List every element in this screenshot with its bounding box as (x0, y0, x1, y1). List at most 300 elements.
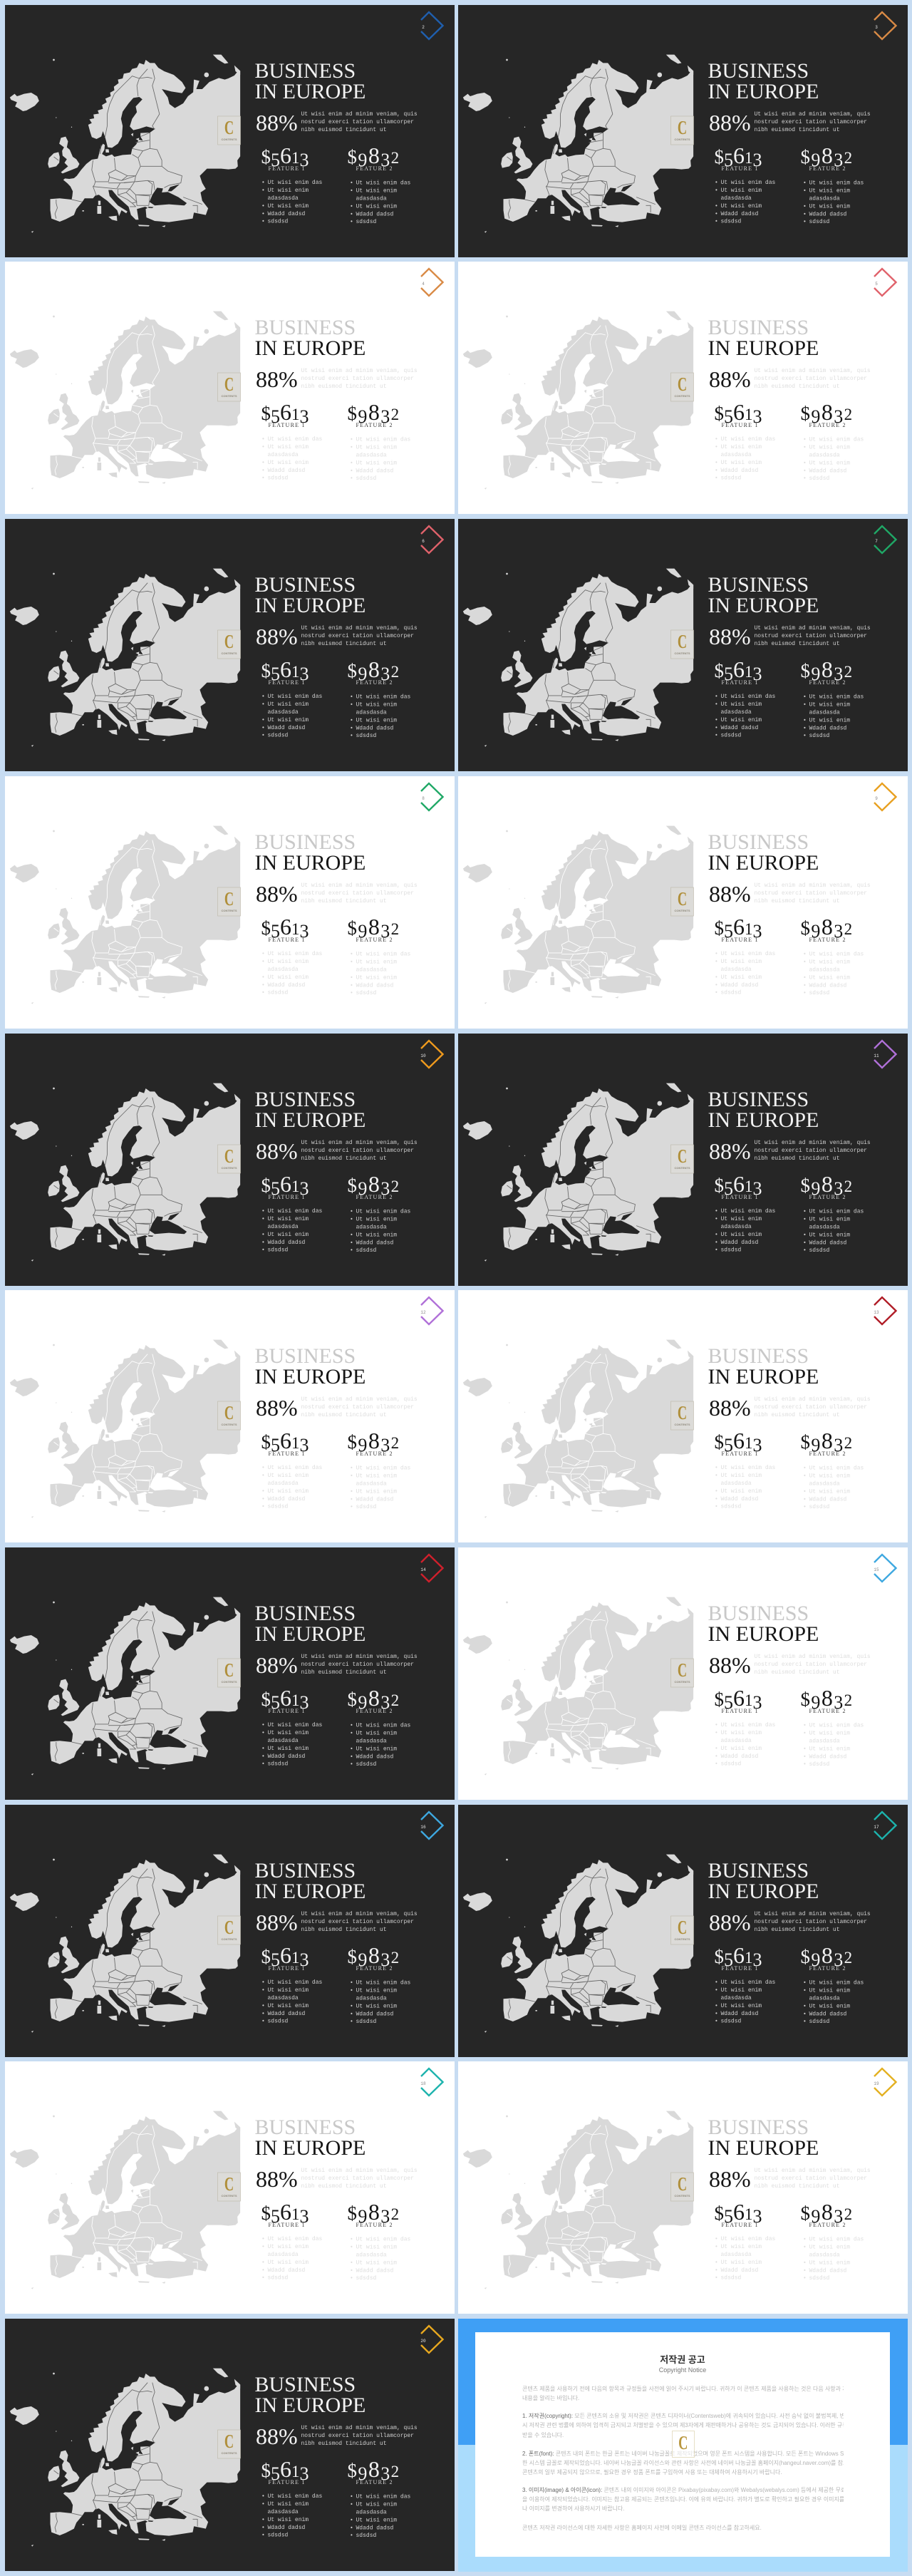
list: feature 2: Ut wisi enim (809, 204, 850, 210)
text block: section 3 (522, 2486, 844, 2512)
list: feature 1 (715, 951, 776, 996)
label: feature 2: FEATURE 2 (809, 1965, 845, 1972)
list: feature 2: • (350, 1232, 353, 1239)
stat: 88%: 88% (709, 366, 751, 392)
figure: $9832: 8 (368, 656, 380, 682)
list: feature 1: • (715, 187, 718, 194)
figure: $9832: $ (348, 1689, 358, 1710)
title (255, 2116, 366, 2160)
list: feature 2: Wdadd dadsd (356, 2011, 394, 2017)
list: feature 2: Ut wisi enim (356, 2502, 397, 2508)
logo watermark: CONTENTS (674, 1423, 690, 1426)
figure: $9832: 9 (358, 1178, 368, 1199)
title (708, 2116, 819, 2160)
title: IN EUROPE (255, 1880, 366, 1903)
list: feature 1: • (715, 2260, 718, 2266)
figure: $5613: 1 (745, 1691, 752, 1709)
list: feature 2: Wdadd dadsd (809, 2268, 847, 2274)
logo watermark: C (224, 373, 234, 395)
figure: $5613: $ (714, 403, 724, 424)
figure: $5613: 1 (291, 2463, 299, 2480)
title: BUSINESS (708, 830, 809, 854)
list: feature 1: • (261, 2260, 265, 2266)
list: feature 1: • (715, 2244, 718, 2250)
figure: $5613: $ (261, 2460, 271, 2481)
text block: Ut wisi enim ad minim veniam, quis (301, 1911, 418, 1917)
figure: $5613: 6 (733, 143, 745, 168)
figure: $5613: 6 (733, 1171, 745, 1197)
list: feature 2: Ut wisi enim (356, 445, 397, 450)
figure: $9832: 9 (811, 1692, 822, 1713)
list: feature 2 (350, 1980, 411, 2025)
list: feature 2: • (350, 468, 353, 475)
list: feature 2: • (350, 1761, 353, 1768)
panel: slide 2 dark (5, 5, 455, 257)
figure: $9832: 8 (368, 2456, 380, 2482)
title (708, 573, 819, 617)
list: feature 2 (803, 1209, 864, 1254)
figure: $5613: 5 (271, 2463, 280, 2484)
list: feature 2: Ut wisi enim (809, 188, 850, 194)
list: feature 1: adasdasda (268, 195, 299, 202)
list: feature 2: • (350, 2533, 353, 2539)
figure: $9832: $ (801, 1689, 811, 1710)
figure: $9832: 9 (811, 2206, 822, 2227)
list: feature 1: Ut wisi enim (721, 1987, 762, 1994)
figure: $9832: 3 (834, 406, 844, 427)
stat: 88%: 88% (709, 1395, 751, 1421)
list: feature 2: Wdadd dadsd (356, 1240, 394, 1246)
figure: $9832: $ (348, 1175, 358, 1196)
icon: page badge 17 (874, 1812, 896, 1839)
text block: Ut wisi enim ad minim veniam, quis (301, 2425, 418, 2431)
figure: $9832: $ (801, 1946, 811, 1967)
list: feature 1: • (261, 444, 265, 450)
icon: page badge 12 (420, 1297, 443, 1324)
list: feature 1: sdsdsd (268, 218, 289, 225)
list: feature 1: Ut wisi enim (721, 2244, 762, 2250)
label: feature 2: FEATURE 2 (356, 1451, 392, 1457)
list: feature 1: Wdadd dadsd (268, 982, 306, 989)
list: feature 2: sdsdsd (356, 1761, 377, 1768)
figure: $5613: 6 (733, 1685, 745, 1711)
figure: $9832: 8 (822, 1685, 834, 1711)
list: feature 2: • (803, 1761, 807, 1768)
logo watermark: CONTENTS (674, 2194, 690, 2198)
icon: page badge 9: 9 (875, 796, 878, 801)
icon: page badge 3 (874, 12, 896, 39)
list: feature 1: • (715, 2267, 718, 2274)
list: feature 1: • (261, 2003, 265, 2009)
title (708, 1602, 819, 1646)
list: feature 2: • (350, 2003, 353, 2010)
list: feature 1: Wdadd dadsd (268, 211, 306, 217)
list: feature 1: • (261, 725, 265, 731)
list: feature 1: sdsdsd (268, 1504, 289, 1510)
text block: nostrud exerci tation ullamcorper (754, 1919, 867, 1925)
figure: $9832: $ (801, 1175, 811, 1196)
figure: $9832: 8 (368, 143, 380, 168)
text block: section 1: 받을 수 있습니다. (522, 2432, 564, 2438)
list: feature 2: Wdadd dadsd (809, 1497, 847, 1503)
title: IN EUROPE (255, 2394, 366, 2417)
list: feature 1: adasdasda (268, 1224, 299, 1230)
list: feature 1: • (261, 1753, 265, 1760)
list: feature 1: • (261, 211, 265, 217)
list: feature 1: • (261, 1247, 265, 1253)
list: feature 1: • (261, 701, 265, 708)
list: feature 2: • (350, 1980, 353, 1986)
stat: 88%: 88% (709, 881, 751, 907)
logo watermark: CONTENTS (221, 1423, 237, 1426)
list: feature 1: • (261, 2275, 265, 2281)
list: feature 2: Wdadd dadsd (356, 1497, 394, 1503)
list: feature 2: sdsdsd (356, 990, 377, 996)
list: feature 1: Ut wisi enim (721, 444, 762, 450)
icon: page badge 2: 2 (422, 25, 425, 30)
list: feature 2: • (350, 1488, 353, 1495)
list: feature 1: • (715, 989, 718, 996)
figure: $5613: $ (714, 2203, 724, 2224)
list: feature 2: sdsdsd (809, 475, 830, 482)
stat: 88%: 88% (709, 110, 751, 135)
figure: $5613: 3 (752, 1435, 762, 1456)
list: feature 2: • (350, 959, 353, 965)
logo watermark: CONTENTS (674, 909, 690, 912)
list: feature 1 (261, 2236, 323, 2281)
map: Europe (463, 2111, 693, 2289)
logo watermark: C (224, 630, 234, 652)
text block (754, 368, 871, 390)
figure: $5613: 6 (733, 1942, 745, 1968)
list: feature 2: Wdadd dadsd (809, 982, 847, 989)
panel: slide 8 light (5, 776, 455, 1029)
list: feature 1: • (715, 1979, 718, 1986)
list: feature 2: • (803, 990, 807, 996)
figure: $5613: 1 (745, 1178, 752, 1195)
icon: page badge 9 (874, 783, 896, 810)
label: feature 1: FEATURE 1 (268, 1965, 305, 1972)
map: Europe (463, 1597, 693, 1776)
icon: page badge 20: 20 (420, 2339, 426, 2344)
icon: page badge 5 (874, 269, 896, 296)
list: feature 2: Ut wisi enim (356, 2518, 397, 2523)
text block: Ut wisi enim ad minim veniam, quis (754, 368, 871, 374)
list: feature 2: • (350, 2502, 353, 2508)
list: feature 1 (261, 1979, 323, 2024)
figure: $5613: 1 (291, 920, 299, 938)
figure: $5613: 1 (291, 406, 299, 423)
list: feature 1: • (715, 2003, 718, 2009)
figure: $9832: 2 (391, 663, 400, 681)
list: feature 1: • (715, 203, 718, 210)
panel: slide 20 dark (5, 2319, 455, 2571)
text block: nibh euismod tincidunt ut (754, 383, 840, 390)
list: feature 2: sdsdsd (356, 219, 377, 225)
text block: nostrud exerci tation ullamcorper (754, 633, 867, 639)
figure: $5613: 5 (724, 664, 733, 684)
logo watermark: C (224, 887, 234, 910)
list: feature 2: Ut wisi enim (356, 959, 397, 965)
text block (301, 1140, 418, 1162)
list: feature 1 (261, 1722, 323, 1768)
stat: 88%: 88% (256, 624, 298, 649)
logo watermark: C (224, 1659, 234, 1681)
text block: nibh euismod tincidunt ut (754, 898, 840, 905)
logo watermark: CONTENTS (674, 1166, 690, 1170)
list: feature 2: sdsdsd (809, 1247, 830, 1254)
list: feature 1: Ut wisi enim (721, 959, 762, 965)
figure: $9832: $ (801, 917, 811, 939)
label: feature 2: FEATURE 2 (809, 1451, 845, 1457)
list: feature 2: • (803, 1473, 807, 1480)
list: feature 1: • (715, 1761, 718, 1768)
list: feature 1: Ut wisi enim (721, 1232, 762, 1238)
list: feature 1: • (715, 1753, 718, 1760)
label: feature 1: FEATURE 1 (721, 1451, 758, 1457)
list: feature 1: sdsdsd (721, 1504, 742, 1510)
figure: $5613: 5 (271, 406, 280, 427)
logo watermark: C (224, 2430, 234, 2452)
figure: $5613: 5 (271, 1949, 280, 1970)
title (255, 573, 366, 617)
text block: closing: 콘텐츠 저작권 라이선스에 대한 자세한 사항은 홈페이지 사전에 이메일 콘텐츠 라이선스를 참고하세요. (522, 2525, 762, 2530)
list: feature 2: Ut wisi enim (809, 959, 850, 965)
logo watermark: CONTENTS (674, 138, 690, 141)
list: feature 2: • (350, 1465, 353, 1471)
logo watermark: C (678, 2432, 688, 2453)
list: feature 2: Wdadd dadsd (356, 211, 394, 218)
text block (754, 1140, 871, 1162)
figure: $5613: 1 (745, 1434, 752, 1452)
icon: page badge 15: 15 (874, 1567, 879, 1572)
figure: $5613: 1 (745, 2205, 752, 2223)
list: feature 2: Ut wisi enim (356, 701, 397, 709)
list: feature 2: sdsdsd (356, 1247, 377, 1254)
list: feature 1: • (261, 717, 265, 723)
label: feature 1: FEATURE 1 (268, 165, 305, 172)
list: feature 1: • (261, 1232, 265, 1238)
list: feature 1: • (715, 1208, 718, 1215)
text block (301, 625, 418, 647)
title: IN EUROPE (255, 2136, 366, 2160)
icon: page badge 20 (420, 2326, 443, 2353)
label: feature 1: FEATURE 1 (268, 1194, 305, 1200)
label: feature 2: FEATURE 2 (356, 679, 392, 686)
label: feature 1: FEATURE 1 (721, 679, 758, 686)
figure: $9832: 8 (368, 1428, 380, 1453)
list: feature 1: • (715, 701, 718, 708)
list: feature 2: • (803, 436, 807, 443)
list: feature 1: adasdasda (268, 2252, 299, 2258)
list: feature 1: adasdasda (721, 452, 752, 458)
figure: $5613: 5 (724, 150, 733, 170)
list: feature 2: • (350, 2518, 353, 2523)
icon: page badge 11 (874, 1041, 896, 1068)
list: feature 2: • (803, 1746, 807, 1752)
figure: $9832: 2 (391, 1178, 400, 1195)
map: Europe (463, 1340, 693, 1518)
figure: $9832: 3 (380, 406, 391, 427)
list: feature 1: Wdadd dadsd (268, 2011, 306, 2017)
title (708, 1859, 819, 1903)
figure: $9832: 9 (358, 1435, 368, 1456)
text block (301, 1396, 418, 1418)
figure: $9832: 9 (358, 921, 368, 942)
title (708, 1344, 819, 1389)
figure: $5613: $ (261, 2203, 271, 2224)
list: feature 1: Ut wisi enim (268, 1746, 309, 1752)
logo watermark: CONTENTS (221, 1937, 237, 1941)
list: feature 2: Ut wisi enim (809, 1731, 850, 1736)
list: feature 2: • (350, 2525, 353, 2532)
panel: slide 10 dark (5, 1034, 455, 1286)
list: feature 2: Ut wisi enim (356, 1216, 397, 1223)
title: BUSINESS (708, 59, 809, 83)
label: feature 1: FEATURE 1 (268, 1708, 305, 1714)
figure: $9832: $ (348, 2460, 358, 2481)
text block (754, 625, 871, 647)
stat: 88%: 88% (709, 1138, 751, 1164)
list: feature 2: • (350, 2268, 353, 2274)
list: feature 2: • (350, 436, 353, 443)
title: BUSINESS (255, 2373, 356, 2396)
list: feature 2: sdsdsd (356, 2019, 377, 2025)
list: feature 2: • (350, 1746, 353, 1752)
icon: page badge 18 (420, 2068, 443, 2096)
list: feature 1: adasdasda (721, 195, 752, 202)
panel: slide 18 light (5, 2061, 455, 2314)
logo watermark: CONTENTS (221, 909, 237, 912)
list: feature 1: Wdadd dadsd (721, 2011, 759, 2017)
title: BUSINESS (708, 316, 809, 339)
icon: page badge 16 (420, 1812, 443, 1839)
list: feature 1: • (715, 951, 718, 957)
list: feature 1: adasdasda (721, 709, 752, 716)
text block: nostrud exerci tation ullamcorper (301, 1661, 414, 1668)
text block (301, 882, 418, 905)
list: feature 2: Ut wisi enim (356, 1731, 397, 1736)
figure: $5613: 6 (733, 914, 745, 939)
logo watermark (672, 2431, 695, 2458)
title: BUSINESS (255, 2116, 356, 2139)
list: feature 1: adasdasda (268, 1480, 299, 1487)
icon: page badge 10 (420, 1041, 443, 1068)
logo watermark: C (678, 1916, 687, 1938)
icon: page badge 16: 16 (420, 1825, 426, 1830)
icon: page badge 2 (421, 12, 443, 39)
figure: $5613: 1 (291, 1691, 299, 1709)
list: feature 2: Wdadd dadsd (809, 211, 847, 218)
logo watermark: C (224, 2173, 234, 2195)
text block: nibh euismod tincidunt ut (301, 898, 387, 905)
text block: Ut wisi enim ad minim veniam, quis (754, 2168, 871, 2174)
text block: nibh euismod tincidunt ut (301, 641, 387, 647)
figure: $9832: 3 (834, 2206, 844, 2227)
list: feature 1 (261, 1208, 323, 1253)
list: feature 1 (715, 180, 776, 225)
list: feature 1: Ut wisi enim (268, 2244, 309, 2250)
text block: nostrud exerci tation ullamcorper (754, 1661, 867, 1668)
list: feature 2: • (350, 2237, 353, 2242)
figure: $5613: 5 (724, 1692, 733, 1713)
stat: 88%: 88% (709, 2166, 751, 2192)
list: feature 2 (350, 2493, 411, 2539)
list: feature 2: • (803, 717, 807, 724)
stat: 88%: 88% (256, 1652, 298, 1678)
list: feature 2: Ut wisi enim das (356, 436, 411, 443)
list: feature 2 (803, 694, 864, 739)
text block: Ut wisi enim ad minim veniam, quis (754, 625, 871, 632)
list: feature 1: • (261, 694, 265, 700)
label: feature 2: FEATURE 2 (356, 2479, 392, 2485)
list: feature 1: Ut wisi enim (721, 2003, 762, 2009)
figure: $9832: 9 (811, 406, 822, 427)
list: feature 1: • (715, 1496, 718, 1503)
figure: $5613: 6 (280, 399, 291, 425)
stat: 88%: 88% (256, 110, 298, 135)
list: feature 1: • (261, 2532, 265, 2539)
figure: $5613: $ (261, 660, 271, 681)
list: feature 2: • (803, 204, 807, 210)
map: Europe (10, 311, 240, 490)
list: feature 2: • (803, 701, 807, 709)
figure: $9832: $ (348, 146, 358, 168)
list: feature 1: sdsdsd (268, 2275, 289, 2281)
stat: 88%: 88% (256, 366, 298, 392)
list: feature 2: • (350, 1504, 353, 1510)
list: feature 2: Wdadd dadsd (356, 2525, 394, 2532)
list: feature 1: Ut wisi enim (721, 717, 762, 723)
label: feature 2: FEATURE 2 (356, 1194, 392, 1200)
list: feature 1: Ut wisi enim (268, 1730, 309, 1736)
list: feature 2: • (803, 1987, 807, 1994)
figure: $5613: 3 (752, 1692, 762, 1713)
list: feature 1: • (715, 725, 718, 731)
logo watermark (218, 2430, 241, 2458)
list: feature 2: adasdasda (356, 967, 387, 974)
list: feature 1: Ut wisi enim (268, 2517, 309, 2523)
list: feature 2: adasdasda (809, 1481, 840, 1487)
logo watermark: CONTENTS (221, 1680, 237, 1684)
panel: slide 3 dark (458, 5, 908, 257)
list: feature 2: Wdadd dadsd (809, 1240, 847, 1246)
logo watermark: CONTENTS (221, 394, 237, 398)
figure: $9832: 3 (380, 150, 391, 170)
icon: page badge 19: 19 (874, 2081, 879, 2086)
title (708, 59, 819, 103)
list: feature 1: Wdadd dadsd (268, 2525, 306, 2531)
title: BUSINESS (255, 1602, 356, 1625)
figure: $5613: 5 (724, 406, 733, 427)
figure: $9832: 8 (822, 2199, 834, 2225)
map: Europe (463, 826, 693, 1004)
figure: $5613: $ (261, 403, 271, 424)
list: feature 2: adasdasda (809, 2252, 840, 2258)
list: feature 2: adasdasda (809, 710, 840, 716)
text block (301, 1911, 418, 1933)
figure: $9832: 8 (822, 1428, 834, 1453)
label: feature 2: FEATURE 2 (356, 2222, 392, 2228)
stat: 88%: 88% (709, 1910, 751, 1935)
list: feature 1: • (715, 2011, 718, 2017)
list: feature 2: • (803, 1488, 807, 1495)
icon: page badge 19 (874, 2068, 896, 2096)
figure: $9832: 2 (391, 920, 400, 938)
text block: nostrud exerci tation ullamcorper (754, 376, 867, 382)
list: feature 1: • (715, 218, 718, 225)
list: feature 1: • (715, 444, 718, 450)
